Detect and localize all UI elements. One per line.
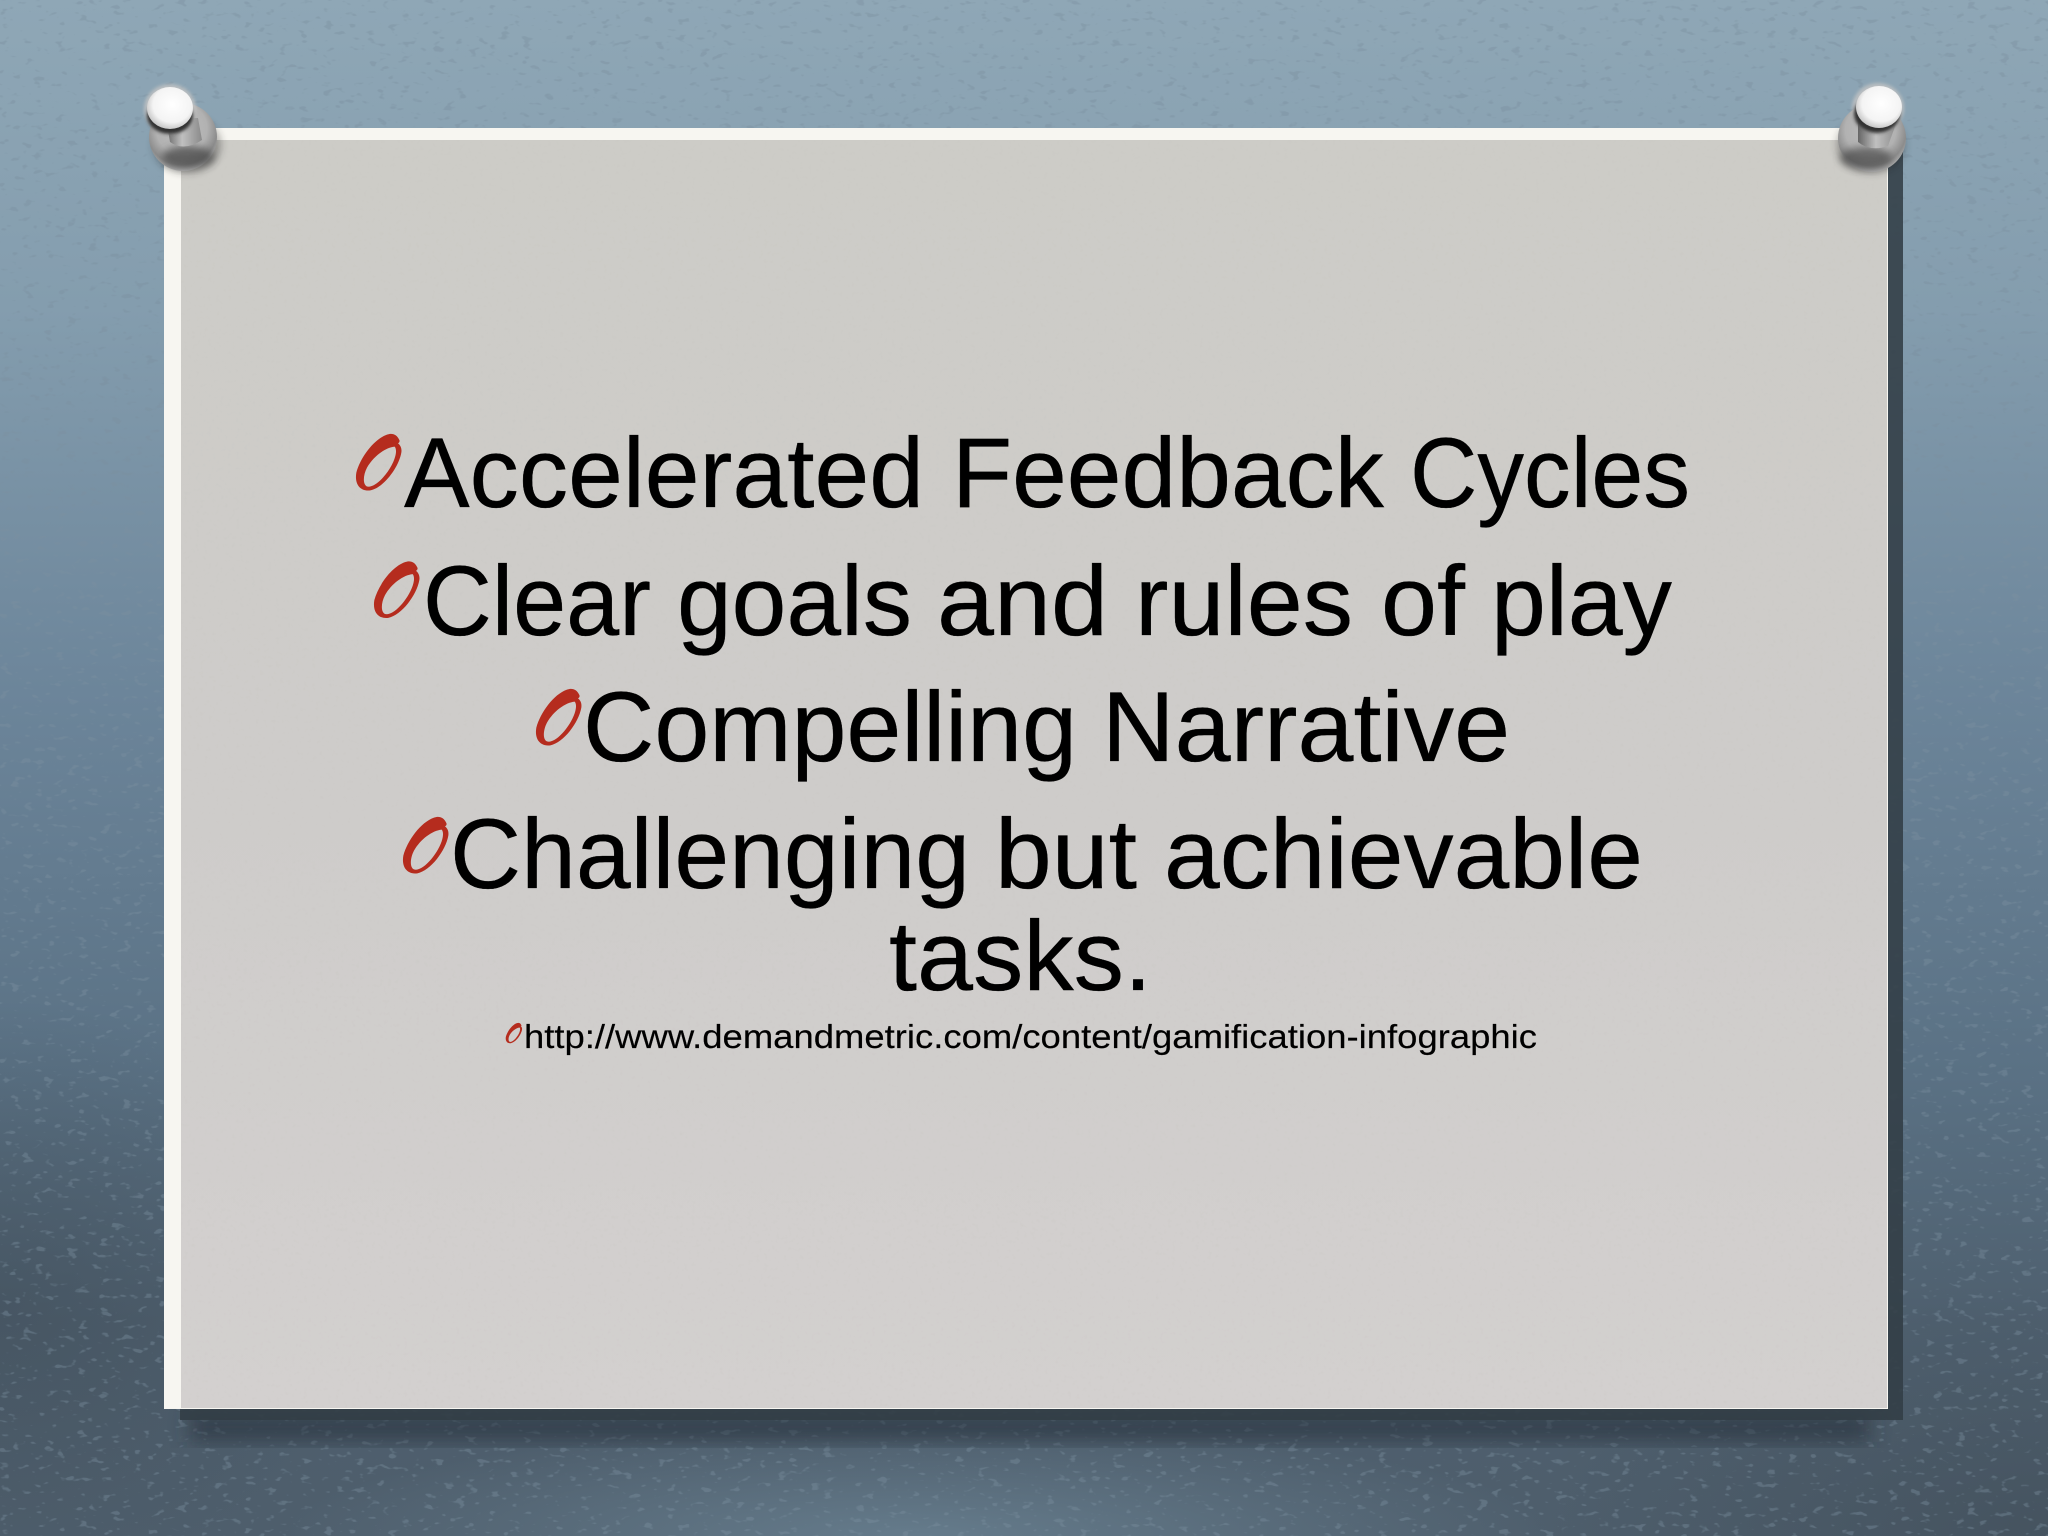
list item: Clear goals and rules of play [374, 545, 1672, 656]
list item: Challenging but achievable tasks: but [995, 798, 1137, 909]
icon: top-right push pin [1837, 83, 1906, 173]
list item: Challenging but achievable tasks: achievable [1164, 798, 1643, 909]
list item: Compelling Narrative [536, 671, 1510, 782]
list item: Clear goals and rules of play: of [1381, 545, 1465, 656]
list item: Accelerated Feedback Cycles: Accelerated [404, 417, 924, 528]
list item: Challenging but achievable tasks: Challenging [450, 798, 970, 909]
icon: top-left push pin [144, 84, 221, 173]
list item: source URL: http://www.demandmetric.com/content/gamification-infographic [524, 1018, 1537, 1055]
list item: Challenging but achievable tasks [403, 798, 1643, 1011]
list item: Compelling Narrative: Narrative [1102, 671, 1510, 782]
bullet list [356, 417, 1690, 1055]
list item: Clear goals and rules of play: and [937, 545, 1108, 656]
list item: Clear goals and rules of play: play [1491, 545, 1672, 656]
list item: Clear goals and rules of play: goals [677, 545, 912, 656]
list item: Clear goals and rules of play: Clear [423, 545, 651, 656]
list item: Accelerated Feedback Cycles [356, 417, 1690, 528]
list item: Accelerated Feedback Cycles: Cycles [1410, 417, 1690, 528]
list item: Accelerated Feedback Cycles: Feedback [952, 417, 1384, 528]
list item: Challenging but achievable tasks: tasks. [889, 900, 1152, 1011]
list item: Clear goals and rules of play: rules [1135, 545, 1353, 656]
list item: Compelling Narrative: Compelling [583, 671, 1077, 782]
panel: paper sheet with white border and shadow [164, 128, 1903, 1442]
